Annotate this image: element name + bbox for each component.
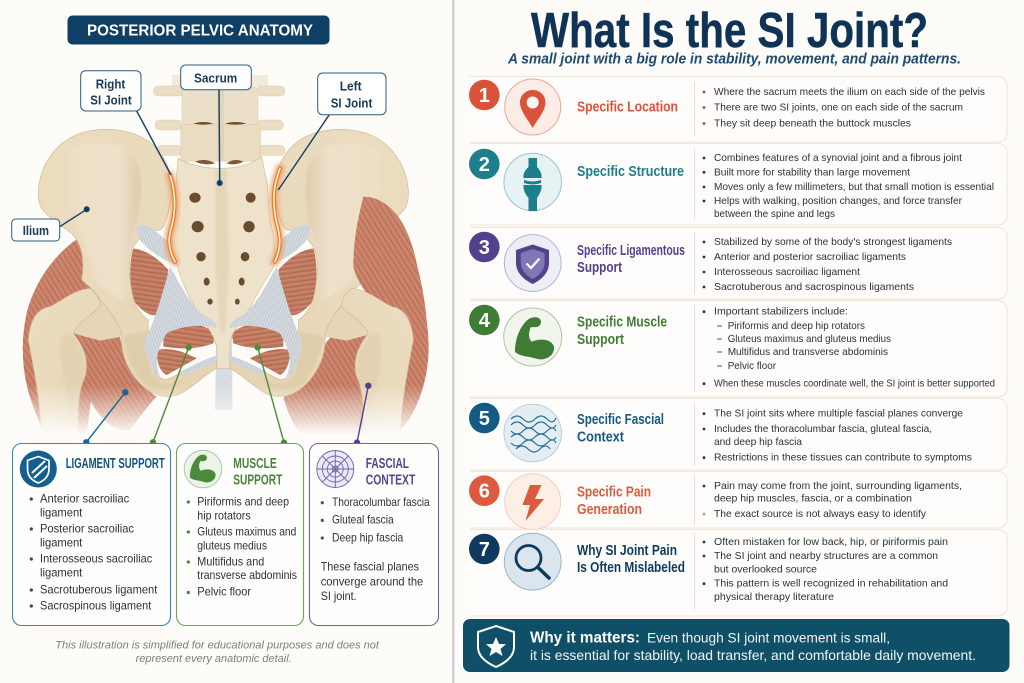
bullets: Moves only a few millimeters, but that small motion is essential: [714, 182, 994, 193]
list: fasciae: Gluteal fascia: [332, 514, 394, 527]
list: muscles: Piriformis and deep: [197, 495, 289, 508]
list: ligaments: ligament: [40, 567, 83, 580]
icon: joint: [504, 153, 562, 211]
icon: location pin: [505, 79, 561, 135]
heading: [577, 543, 685, 576]
bullets: Pain may come from the joint, surrounding ligaments,: [714, 481, 962, 492]
bullets: [703, 537, 948, 603]
heading: Is Often Mislabeled: [577, 560, 685, 576]
bullets: between the spine and legs: [714, 209, 835, 220]
icon: flexed arm: [184, 450, 222, 488]
icon: shield check: [504, 235, 561, 291]
badge 7: [469, 534, 500, 564]
heading: [577, 243, 685, 276]
bullets: and deep hip fascia: [714, 437, 802, 448]
list: ligaments: ligament: [40, 506, 83, 519]
badge 4: 4: [479, 310, 491, 332]
list: ligaments: Interosseous sacroiliac: [40, 552, 152, 565]
heading: [577, 485, 651, 518]
badge 2: [469, 149, 500, 179]
bullets: When these muscles coordinate well, the SI joint is better supported: [714, 379, 995, 390]
row 4: specific muscle support: [469, 300, 1007, 397]
heading: Specific Pain: [577, 485, 651, 501]
bullets: Important stabilizers include:: [714, 307, 848, 318]
icon: fascial web: [317, 450, 354, 488]
card: muscle support: [176, 444, 304, 626]
heading: posterior pelvic anatomy: [68, 16, 330, 44]
list: fasciae: [321, 496, 430, 544]
icon: shield star: [478, 626, 514, 667]
heading: Why SI Joint Pain: [577, 543, 677, 559]
banner: why it matters: Even though SI joint movement is small,: [647, 631, 890, 646]
bullets: Combines features of a synovial joint and a fibrous joint: [714, 153, 962, 164]
footnote: This illustration is simplified for educational purposes and does not: [55, 639, 380, 651]
bullets: This pattern is well recognized in rehabilitation and: [714, 579, 948, 590]
row 6: specific pain generation: [469, 472, 1007, 530]
card: muscle support: MUSCLE: [233, 456, 277, 472]
bullets: [703, 237, 952, 293]
list: ligaments: Posterior sacroiliac: [40, 522, 134, 535]
icon: magnifier: [504, 533, 561, 590]
heading: [577, 315, 667, 348]
badge 4: [469, 305, 500, 335]
heading: Support: [577, 260, 622, 276]
banner: why it matters: Why it matters:: [530, 630, 640, 647]
bullets: Helps with walking, position changes, and force transfer: [714, 196, 963, 207]
banner: why it matters: it is essential for stability, load transfer, and comfortable daily movement.: [530, 648, 976, 663]
bullets: The exact source is not always easy to identify: [714, 509, 927, 520]
bullets: Sacrotuberous and sacrospinous ligaments: [714, 282, 914, 293]
label: Ilium: Ilium: [23, 223, 49, 238]
badge 6: [469, 475, 500, 506]
card: ligament support: LIGAMENT SUPPORT: [66, 456, 165, 472]
badge 5: 5: [479, 408, 490, 430]
row 1: specific location: [469, 76, 1007, 142]
row 5: specific fascial context: [469, 398, 1007, 470]
list: fasciae: Deep hip fascia: [332, 531, 404, 544]
badge 7: 7: [479, 539, 490, 561]
bullets: Piriformis and deep hip rotators: [728, 321, 865, 332]
heading: [577, 412, 664, 446]
heading: posterior pelvic anatomy: POSTERIOR PELVIC ANATOMY: [87, 22, 314, 40]
list: ligaments: ligament: [40, 537, 83, 550]
list: ligaments: [30, 492, 158, 612]
heading: Specific Fascial: [577, 412, 664, 428]
card: ligament support: [12, 444, 170, 626]
label: Right SI Joint: Right: [96, 76, 126, 91]
bullets: [703, 409, 972, 464]
subtitle: A small joint with a big role in stability, movement, and pain patterns.: [507, 52, 961, 68]
list: muscles: Gluteus maximus and: [197, 525, 296, 538]
footnote: [55, 639, 380, 665]
icon: ligament shield: [20, 450, 57, 488]
bullets: Interosseous sacroiliac ligament: [714, 267, 860, 278]
list: muscles: Pelvic floor: [197, 586, 251, 599]
list: fasciae: Thoracolumbar fascia: [332, 496, 430, 509]
bullets: Gluteus maximus and gluteus medius: [728, 334, 891, 345]
badge 5: [469, 403, 500, 433]
icon: fascial mesh: [504, 404, 562, 462]
heading: Support: [577, 332, 624, 348]
note: fascial planes: SI joint.: [321, 590, 357, 603]
list: ligaments: Anterior sacroiliac: [40, 492, 129, 505]
panel: posterior pelvic anatomy: [0, 16, 452, 665]
bullets: The SI joint and nearby structures are a common: [714, 551, 938, 562]
bullets: Where the sacrum meets the ilium on each side of the pelvis: [714, 87, 985, 98]
card: fascial context: FASCIAL: [366, 456, 409, 472]
label: Left SI Joint: SI Joint: [331, 95, 373, 110]
list: muscles: hip rotators: [197, 509, 251, 522]
row 1: specific location: Specific Location: [577, 100, 678, 116]
label: Right SI Joint: [81, 71, 141, 111]
badge 3: 3: [479, 237, 490, 259]
row 3: specific ligamentous support: [469, 228, 1007, 299]
banner: why it matters: [463, 619, 1010, 672]
bullets: Built more for stability than large movement: [714, 167, 910, 178]
bullets: Restrictions in these tissues can contribute to symptoms: [714, 453, 972, 464]
heading: Specific Ligamentous: [577, 243, 685, 259]
badge 1: [469, 80, 500, 110]
row 2: specific structure: [469, 144, 1007, 225]
bullets: Often mistaken for low back, hip, or piriformis pain: [714, 537, 948, 548]
card: fascial context: CONTEXT: [366, 472, 415, 488]
note: fascial planes: [321, 560, 423, 603]
list: muscles: [187, 495, 297, 599]
list: ligaments: Sacrospinous ligament: [40, 599, 152, 612]
bullets: [703, 307, 995, 390]
bullets: physical therapy literature: [714, 592, 834, 603]
label: Right SI Joint: SI Joint: [90, 92, 132, 107]
bullets: Stabilized by some of the body's strongest ligaments: [714, 237, 952, 248]
bullets: There are two SI joints, one on each side of the sacrum: [714, 102, 963, 114]
badge 2: 2: [479, 154, 490, 176]
icon: flexed arm: [504, 308, 562, 366]
list: muscles: transverse abdominis: [197, 569, 297, 582]
label: Sacrum: [181, 65, 251, 90]
bullets: Multifidus and transverse abdominis: [728, 347, 888, 358]
bullets: Anterior and posterior sacroiliac ligaments: [714, 252, 906, 263]
bullets: [703, 481, 962, 520]
illustration: pelvis anatomy: [0, 75, 452, 446]
list: muscles: gluteus medius: [197, 539, 267, 552]
bullets: The SI joint sits where multiple fascial planes converge: [714, 409, 963, 420]
list: muscles: Multifidus and: [197, 555, 264, 568]
footnote: represent every anatomic detail.: [136, 653, 292, 665]
badge 6: 6: [479, 481, 490, 503]
bullets: They sit deep beneath the buttock muscles: [714, 118, 911, 130]
card: fascial context: [310, 444, 438, 626]
title: What Is the SI Joint?: [531, 4, 928, 58]
bullets: Pelvic floor: [728, 361, 777, 372]
bullets: [703, 87, 985, 130]
note: fascial planes: converge around the: [321, 575, 423, 588]
heading: Generation: [577, 502, 642, 518]
list: ligaments: Sacrotuberous ligament: [40, 583, 158, 596]
note: fascial planes: These fascial planes: [321, 560, 419, 573]
bullets: but overlooked source: [714, 565, 817, 576]
row 7: why SI joint pain is often mislabeled: [469, 530, 1007, 616]
label: Left SI Joint: Left: [340, 79, 362, 94]
heading: Specific Muscle: [577, 315, 667, 331]
label: Sacrum: Sacrum: [194, 71, 237, 86]
bullets: deep hip muscles, fascia, or a combination: [714, 494, 912, 505]
leader lines: [60, 90, 371, 446]
card: muscle support: SUPPORT: [233, 472, 282, 488]
bullets: Includes the thoracolumbar fascia, gluteal fascia,: [714, 424, 932, 435]
row 2: specific structure: Specific Structure: [577, 164, 684, 180]
badge 1: 1: [479, 85, 490, 107]
label: Ilium: [12, 219, 60, 241]
label: Left SI Joint: [318, 73, 386, 115]
icon: pain bolt: [505, 474, 561, 530]
badge 3: [469, 232, 500, 262]
heading: Context: [577, 430, 624, 446]
bullets: [703, 153, 994, 220]
